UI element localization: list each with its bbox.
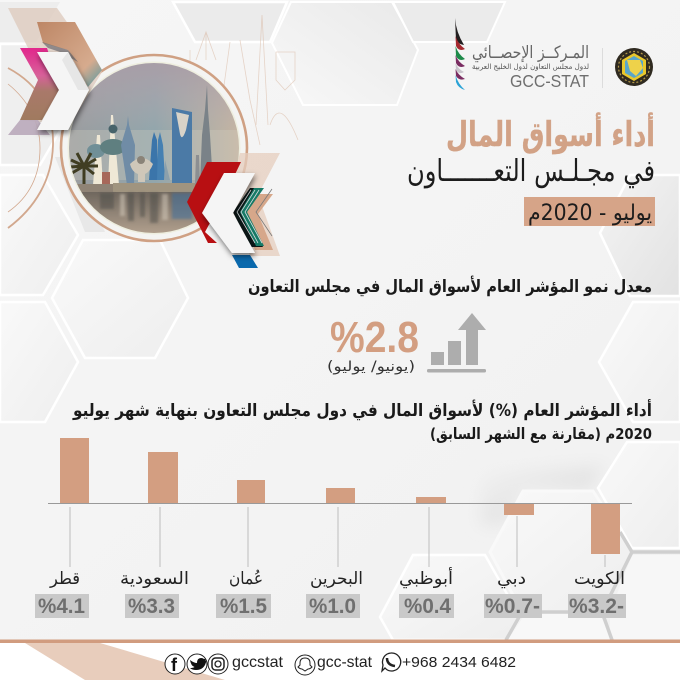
logo GCC-STAT text: GCC-STAT	[510, 71, 589, 91]
Kuwait towers	[93, 115, 119, 185]
water tower	[130, 158, 153, 182]
faint skyline drawing	[190, 15, 298, 145]
chart baseline	[48, 503, 632, 504]
left arcs	[8, 68, 53, 228]
water	[82, 192, 197, 233]
icon: snapchat	[295, 655, 315, 675]
chart market names: دبي	[497, 569, 526, 589]
chart values: %1.5	[220, 595, 267, 618]
chart market names: قطر	[49, 569, 80, 589]
date badge: يوليو - 2020م	[528, 201, 652, 226]
chart value boxes	[35, 594, 626, 618]
icon: facebook: f	[171, 655, 178, 675]
chart market names: أبوظبي	[399, 567, 453, 589]
chart values: %1.0	[309, 595, 356, 618]
chart leader lines	[70, 507, 605, 567]
bar chart	[35, 438, 632, 618]
icon: whatsapp	[382, 653, 401, 671]
bottom copper band and white footer	[0, 640, 680, 680]
chart values: %3.2-	[569, 595, 624, 618]
palm	[70, 152, 98, 184]
grey shading behind the chart right side	[480, 465, 605, 525]
Kingdom Centre	[172, 108, 192, 184]
left chevron group	[8, 8, 102, 135]
right chevron group	[187, 153, 280, 268]
KPI value: %2.8	[330, 313, 419, 362]
logo: GCC-STAT	[455, 18, 589, 91]
handle: gccstat: gccstat	[232, 654, 284, 671]
handle: gcc-stat: gcc-stat	[317, 654, 373, 671]
chart market names: البحرين	[310, 569, 363, 589]
promenade	[77, 184, 196, 192]
logo ribbon	[455, 18, 465, 90]
chart values	[38, 595, 624, 618]
chart market names: عُمان	[229, 569, 263, 589]
logo subtitle: لدول مجلس التعاون لدول الخليج العربية	[472, 62, 589, 71]
subheading: 2020م (مقارنة مع الشهر السابق)	[430, 425, 652, 443]
photo circle: Gulf skyline	[55, 55, 247, 241]
Burj	[200, 86, 212, 176]
chart market names: السعودية	[120, 569, 189, 589]
logo divider	[602, 48, 603, 88]
icon: growth arrow	[427, 313, 486, 372]
chart market names	[49, 567, 625, 589]
chart values: %4.1	[38, 595, 85, 618]
chart values: %3.3	[128, 595, 175, 618]
icon: instagram	[208, 654, 228, 674]
chart market names: الكويت	[574, 569, 625, 589]
icon: facebook	[165, 654, 185, 675]
icon: GCC emblem	[615, 48, 653, 86]
phone number: +968 2434 6482	[402, 654, 516, 671]
chart bars	[60, 438, 620, 554]
chart values: %0.7-	[485, 595, 540, 618]
chart values: %0.4	[404, 595, 451, 618]
KPI caption: (يونيو/ يوليو)	[327, 359, 415, 375]
icon: twitter	[187, 654, 207, 674]
logo Arabic name: المـركــز الإحصــائي	[472, 43, 589, 63]
footer social contacts	[165, 653, 516, 675]
